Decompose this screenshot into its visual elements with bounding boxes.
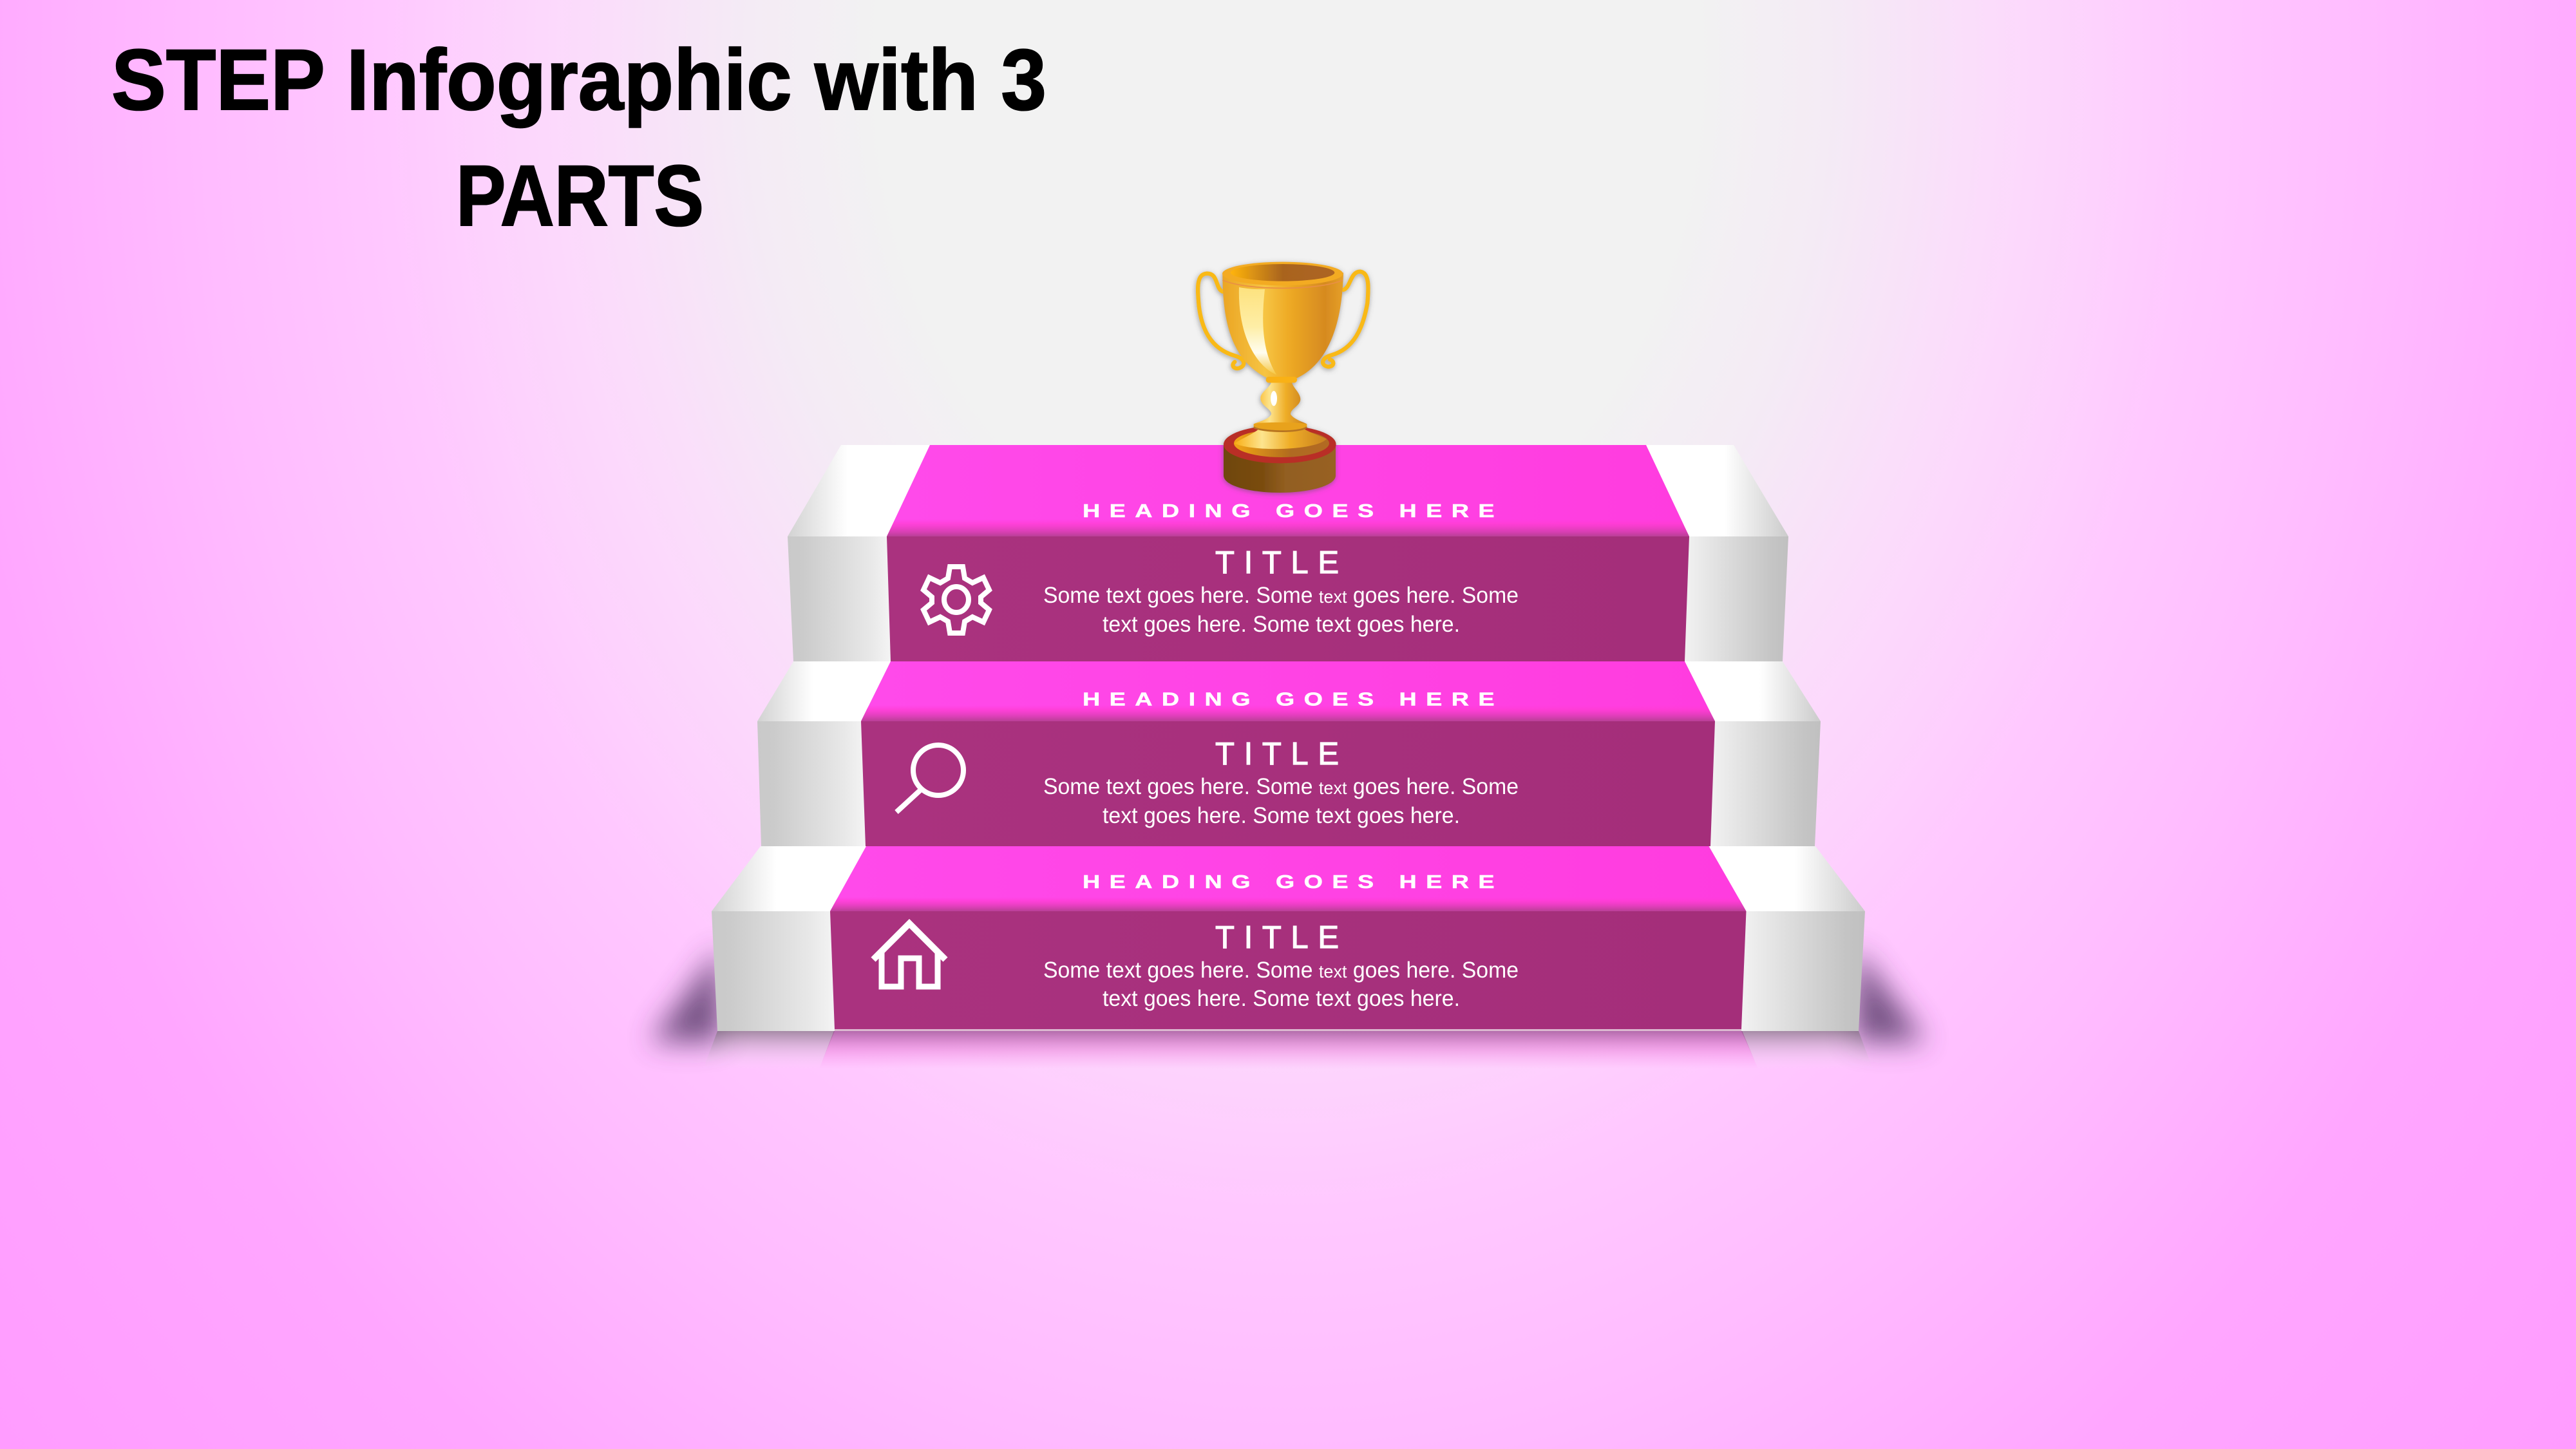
body text: Some text goes here. Some text goes here. Some [1043,583,1519,608]
step title: TITLE [1215,737,1339,772]
trophy handles [1198,272,1368,368]
body text [1043,774,1519,828]
icon: gear [923,567,989,633]
body text: text goes here. Some text goes here. [1103,612,1460,637]
trophy base [1224,443,1336,493]
icon: magnifier [896,745,963,812]
icon: house [873,923,945,987]
heading: HEADING GOES HERE [1083,501,1495,522]
panel: step 1 (top) [788,445,1788,661]
step title: TITLE [1215,920,1339,955]
trophy stem [1254,382,1307,424]
title [111,32,1046,244]
heading: HEADING GOES HERE [1083,872,1495,893]
title: PARTS [456,148,704,244]
icon: gold trophy [1198,262,1368,493]
body text [1043,583,1519,637]
body text [1043,958,1519,1011]
step title: TITLE [1215,545,1339,580]
heading: HEADING GOES HERE [1083,689,1495,710]
body text: Some text goes here. Some text goes here. Some [1043,774,1519,799]
panel: step 2 (middle) [757,661,1821,846]
title: STEP Infographic with 3 [111,32,1046,128]
floor shadows [650,947,1926,1069]
body text: text goes here. Some text goes here. [1103,803,1460,828]
trophy cup [1222,272,1343,378]
body text: text goes here. Some text goes here. [1103,986,1460,1011]
body text: Some text goes here. Some text goes here. Some [1043,958,1519,983]
panel: step 3 (bottom) [712,846,1865,1031]
